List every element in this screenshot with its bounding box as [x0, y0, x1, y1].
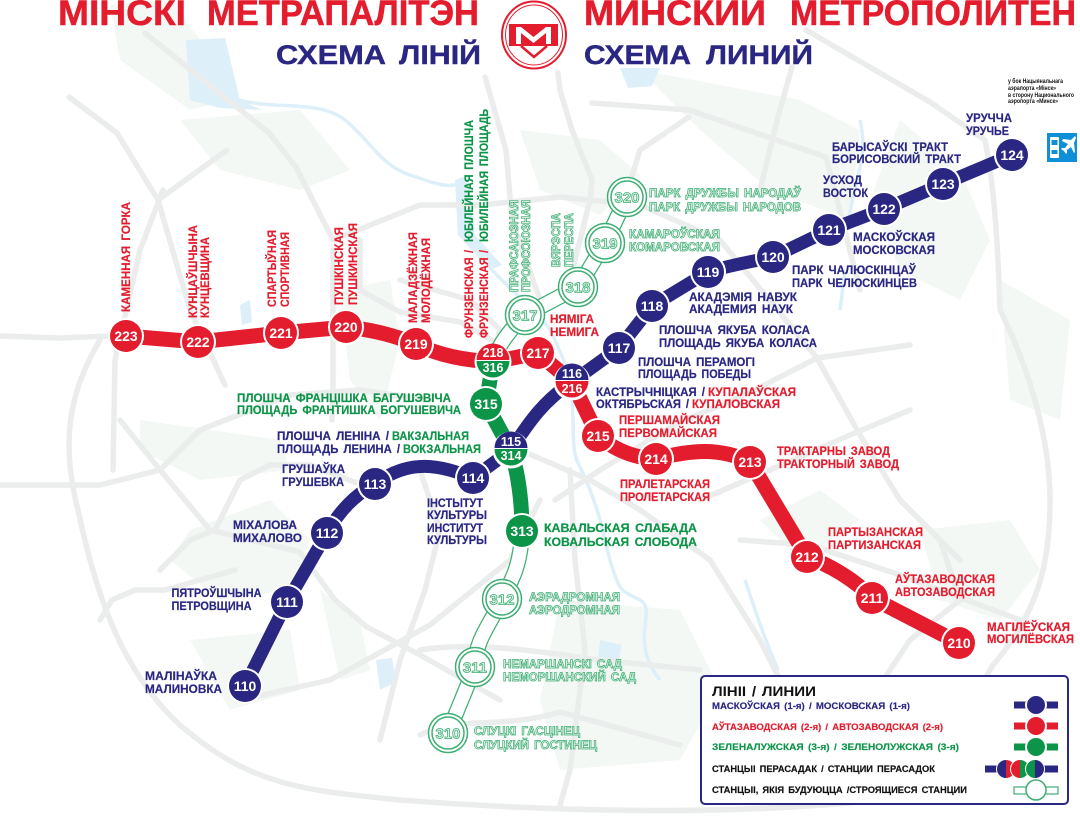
- airport note: аэрапорта «Мінск»: [1008, 86, 1057, 92]
- legend row: interchange: [712, 759, 1058, 779]
- stations under construction: 311: [463, 660, 487, 676]
- labels of line 2: СПОРТИВНАЯ: [278, 232, 292, 307]
- stations of line 1: 118: [641, 298, 664, 314]
- labels of line 1: БАРЫСАЎСКІ ТРАКТ: [832, 139, 949, 154]
- stations of line 1: 124: [1000, 147, 1024, 163]
- labels of line 1: ПЛОШЧА ЯКУБА КОЛАСА: [659, 323, 810, 337]
- labels of line 2: ПУШКИНСКАЯ: [346, 223, 360, 305]
- line 3 built section: [486, 362, 522, 531]
- labels of line 1: ПАРК ЧАЛЮСКІНЦАЎ: [792, 262, 917, 277]
- line 1 blue: [245, 155, 1012, 686]
- labels of line 1: ПЛОЩАДЬ ЯКУБА КОЛАСА: [659, 336, 817, 350]
- stations of line 1: 111: [276, 594, 298, 610]
- stations of line 2: 222: [186, 334, 210, 350]
- stations under construction: 319: [592, 236, 618, 252]
- stations of line 2: 212: [795, 549, 819, 565]
- labels of line 2: НЯМІГА: [550, 312, 594, 326]
- labels of line 2: КУНЦАЎШЧЫНА: [185, 225, 200, 318]
- stations of line 2: 210: [947, 635, 971, 651]
- labels of line 1: ПАРК ЧЕЛЮСКИНЦЕВ: [792, 276, 917, 290]
- stations of line 2: [108, 309, 977, 661]
- stations under construction: 320: [614, 190, 640, 206]
- stations of line 2: 214: [644, 451, 668, 467]
- labels of stations under construction: ПРОФСОЮЗНАЯ: [519, 200, 533, 292]
- interchange stations: 115: [501, 435, 521, 449]
- legend row: line 1: МАСКОЎСКАЯ (1-я) / МОСКОВСКАЯ (1-я): [712, 700, 910, 712]
- labels of line 1: ПЛОШЧА ЛЕНІНА /: [277, 429, 390, 443]
- legend heading: ЛІНІІ / ЛИНИИ: [712, 683, 816, 699]
- airport note: [1008, 78, 1074, 105]
- stations of line 3: 315: [474, 396, 498, 412]
- stations of line 2: 219: [404, 336, 428, 352]
- subtitle: Belarusian: [276, 39, 481, 70]
- stations of line 1: 112: [316, 525, 339, 541]
- labels of line 2: ТРАКТАРНЫ ЗАВОД: [777, 444, 890, 458]
- labels of line 1: ПЯТРОЎШЧЫНА: [172, 585, 262, 600]
- labels of line 2: ПРАЛЕТАРСКАЯ: [620, 477, 710, 491]
- labels of line 1: ГРУШАЎКА: [282, 461, 345, 476]
- stations of line 1: [227, 137, 1030, 704]
- labels of stations under construction: СЛУЦКИЙ ГОСТИНЕЦ: [474, 737, 597, 752]
- labels of line 2: АВТОЗАВОДСКАЯ: [895, 585, 995, 599]
- stations of line 1: 114: [462, 470, 485, 486]
- labels of line 2: СПАРТЫЎНАЯ: [264, 230, 279, 307]
- labels of stations under construction: КАМАРОЎСКАЯ: [629, 226, 720, 241]
- labels of line 1: УРУЧЧА: [966, 111, 1012, 125]
- stations of line 1: 120: [761, 249, 785, 265]
- labels of line 1: МИХАЛОВО: [233, 531, 302, 545]
- title: Belarusian: [58, 0, 479, 33]
- labels of line 1: МІХАЛОВА: [233, 518, 297, 532]
- stations of line 2: 213: [738, 454, 762, 470]
- labels of stations under construction: КОМАРОВСКАЯ: [629, 240, 720, 254]
- labels of line 1: МАЛИНОВКА: [145, 682, 222, 696]
- labels of line 3: ЮБІЛЕЙНАЯ ПЛОШЧА: [461, 120, 476, 242]
- interchange stations: 218: [483, 346, 503, 360]
- labels of line 1: ІНСТЫТУТ: [427, 496, 484, 510]
- labels of line 3: ЮБИЛЕЙНАЯ ПЛОЩАДЬ: [476, 109, 491, 242]
- stations of line 1: 123: [931, 176, 955, 192]
- labels of line 3: [237, 109, 697, 549]
- subtitle: Russian: ЛИНИЙ: [706, 39, 813, 70]
- airport note: у бок Нацыянальнага: [1008, 78, 1064, 85]
- legend row: line 2: [712, 715, 1058, 737]
- stations under construction: 317: [512, 308, 538, 324]
- rivers and lakes: [186, 38, 660, 690]
- labels of line 2: ФРУНЗЕНСКАЯ /: [477, 249, 491, 338]
- subtitle: Russian: СХЕМА: [584, 40, 691, 70]
- labels of line 2: ПАРТЫЗАНСКАЯ: [828, 525, 923, 539]
- labels of line 2: НЕМИГА: [550, 325, 599, 339]
- labels of line 2: КУПАЛОВСКАЯ: [692, 397, 780, 411]
- stations under construction: 318: [565, 280, 591, 296]
- labels of line 1: ПЛОЩАДЬ ПОБЕДЫ: [638, 367, 751, 381]
- stations of line 2: 217: [526, 345, 550, 361]
- stations of line 2: 211: [861, 590, 884, 606]
- labels of line 1: МАЛІНАЎКА: [145, 668, 217, 683]
- legend row: line 1: [712, 694, 1058, 716]
- subtitle: Russian: [584, 39, 813, 70]
- stations of line 3: [468, 386, 540, 549]
- labels of line 2: МАГІЛЁЎСКАЯ: [987, 619, 1070, 634]
- labels of stations under construction: ПЕРЕСПА: [562, 213, 576, 267]
- labels of line 2: [119, 202, 1074, 646]
- labels of line 3: КОВАЛЬСКАЯ СЛОБОДА: [544, 535, 697, 549]
- labels of line 3: КАВАЛЬСКАЯ СЛАБАДА: [544, 521, 697, 535]
- stations of line 1: 121: [817, 222, 841, 238]
- labels of stations under construction: АЭРАДРОМНАЯ: [529, 590, 620, 604]
- labels of line 1: АКАДЭМІЯ НАВУК: [689, 290, 798, 304]
- labels of line 2: КУПАЛАЎСКАЯ: [708, 384, 796, 399]
- labels of line 2: АЎТАЗАВОДСКАЯ: [895, 571, 995, 586]
- labels of line 2: МОГИЛЁВСКАЯ: [987, 631, 1074, 646]
- labels of line 1: УСХОД: [823, 173, 862, 187]
- stations under construction: 310: [435, 726, 461, 742]
- labels of line 1: КУЛЬТУРЫ: [427, 508, 487, 522]
- labels of line 1: БОРИСОВСКИЙ ТРАКТ: [832, 151, 962, 166]
- labels of line 2: МАЛАДЗЁЖНАЯ: [405, 232, 420, 323]
- interchange stations: [474, 344, 590, 468]
- labels of line 1: ОКТЯБРЬСКАЯ /: [596, 397, 690, 411]
- labels of stations under construction: НЕМАРШАНСКІ САД: [503, 657, 622, 671]
- legend row: line 3: ЗЕЛЕНАЛУЖСКАЯ (3-я) / ЗЕЛЕНОЛУЖСКАЯ (3-я): [712, 742, 959, 753]
- stations of line 1: 113: [364, 476, 387, 492]
- line 3 under construction: tube sections: [448, 197, 627, 733]
- labels of line 3: ВАКЗАЛЬНАЯ: [392, 429, 469, 443]
- labels of line 2: МОЛОДЁЖНАЯ: [418, 238, 433, 323]
- labels of line 1: МОСКОВСКАЯ: [853, 243, 935, 257]
- subtitle: Belarusian: СХЕМА: [276, 40, 386, 70]
- stations of line 1: 117: [608, 340, 631, 356]
- airport note: аэропорта «Минск»: [1008, 99, 1059, 105]
- labels of line 1: [145, 111, 1012, 696]
- labels of line 1: КУЛЬТУРЫ: [427, 533, 487, 547]
- labels of stations under construction: АЭРОДРОМНАЯ: [529, 603, 620, 617]
- legend row: under construction: [712, 780, 1058, 800]
- interchange stations: 216: [562, 382, 582, 396]
- stations under construction: 312: [489, 592, 515, 608]
- icon: bus and plane: [1047, 133, 1077, 162]
- labels of line 2: ПАРТИЗАНСКАЯ: [828, 538, 921, 552]
- labels of line 1: АКАДЕМИЯ НАУК: [689, 302, 794, 316]
- labels of line 3: ПЛОЩАДЬ ФРАНТИШКА БОГУШЕВИЧА: [237, 403, 461, 417]
- labels of stations under construction: [474, 185, 802, 752]
- stations of line 1: 110: [234, 678, 257, 694]
- labels of line 2: ПУШКІНСКАЯ: [332, 227, 346, 305]
- subtitle: Belarusian: ЛІНІЙ: [399, 39, 481, 70]
- labels of stations under construction: ВЯРЭСПА: [549, 213, 563, 267]
- labels of stations under construction: ПАРК ДРУЖБЫ НАРОДОВ: [649, 200, 801, 214]
- interchange stations: 116: [562, 367, 582, 381]
- legend row: interchange: СТАНЦЫІ ПЕРАСАДАК / СТАНЦИИ ПЕРАСАДОК: [712, 764, 935, 775]
- labels of line 1: ПЛОШЧА ПЕРАМОГІ: [638, 355, 755, 369]
- labels of line 3: ВОКЗАЛЬНАЯ: [403, 442, 481, 456]
- labels of line 2: КУНЦЕВЩИНА: [198, 237, 212, 318]
- labels of line 1: ГРУШЕВКА: [282, 475, 344, 489]
- interchange stations: 316: [483, 361, 503, 375]
- labels of line 1: ВОСТОК: [823, 186, 869, 200]
- labels of line 2: ПРОЛЕТАРСКАЯ: [620, 490, 710, 504]
- stations of line 2: 223: [114, 328, 138, 344]
- labels of line 1: МАСКОЎСКАЯ: [853, 229, 935, 244]
- labels of line 1: ПЛОЩАДЬ ЛЕНИНА /: [277, 442, 401, 456]
- metro logo: [502, 2, 566, 68]
- legend row: under construction: СТАНЦЫІ, ЯКІЯ БУДУЮЦЦА /СТРОЯЩИЕСЯ СТАНЦИИ: [712, 785, 967, 796]
- labels of line 1: КАСТРЫЧНІЦКАЯ /: [596, 385, 706, 399]
- labels of stations under construction: ПРАФСАЮЗНАЯ: [507, 200, 521, 292]
- legend panel: [701, 676, 1068, 804]
- labels of line 1: ПЕТРОВЩИНА: [172, 599, 252, 613]
- labels of stations under construction: ПАРК ДРУЖБЫ НАРОДАЎ: [649, 185, 802, 200]
- labels of line 2: ТРАКТОРНЫЙ ЗАВОД: [777, 456, 899, 471]
- stations of line 1: 119: [697, 264, 720, 280]
- stations of line 2: 215: [586, 428, 610, 444]
- stations of line 1: 122: [872, 201, 896, 217]
- labels of line 2: ПЕРВОМАЙСКАЯ: [619, 425, 717, 440]
- labels of line 2: КАМЕННАЯ ГОРКА: [119, 202, 133, 312]
- stations of line 2: 221: [269, 325, 293, 341]
- line 2 red: [126, 327, 959, 643]
- legend row: line 2: АЎТАЗАВОДСКАЯ (2-я) / АВТОЗАВОДСКАЯ (2-я): [712, 721, 943, 733]
- labels of stations under construction: НЕМОРШАНСКИЙ САД: [503, 669, 636, 684]
- labels of stations under construction: СЛУЦКІ ГАСЦІНЕЦ: [474, 724, 580, 738]
- legend row: line 3: [712, 736, 1058, 758]
- stations of line 3: 313: [510, 523, 534, 539]
- labels of line 1: ИНСТИТУТ: [427, 521, 484, 535]
- labels of line 3: ПЛОШЧА ФРАНЦІШКА БАГУШЭВІЧА: [237, 391, 451, 405]
- labels of line 2: ФРУНЗЕНСКАЯ /: [462, 249, 476, 338]
- stations of line 2: 220: [334, 319, 358, 335]
- interchange stations: 314: [501, 449, 521, 463]
- labels of line 1: УРУЧЬЕ: [966, 124, 1009, 138]
- title: Russian: [584, 0, 1076, 33]
- labels of line 2: ПЕРШАМАЙСКАЯ: [619, 412, 720, 427]
- stations under construction: [428, 178, 646, 752]
